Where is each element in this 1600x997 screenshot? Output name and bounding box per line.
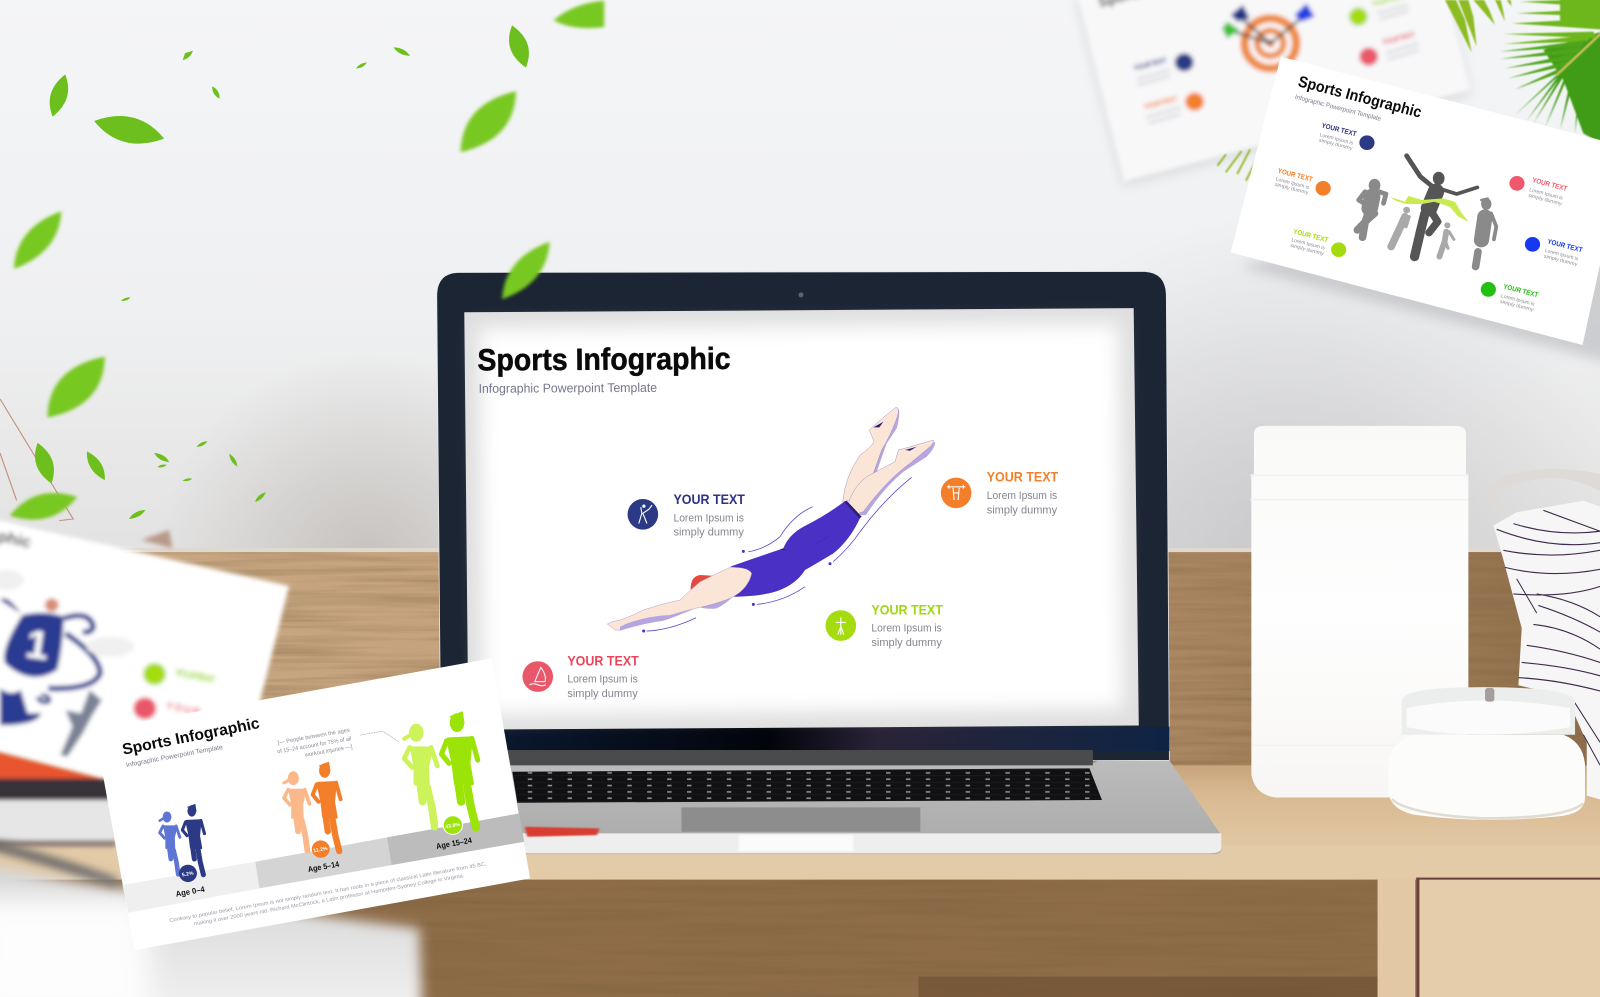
callout: red: YOUR TEXT <box>567 653 639 668</box>
callout: orange: simply dummy <box>987 504 1058 516</box>
items: simply dummy <box>1499 299 1535 313</box>
blurred slide: target: YOUR TEXT <box>1143 94 1179 111</box>
callout: green <box>826 602 943 649</box>
callout: orange <box>941 470 1059 516</box>
blurred slide: trophy: YOUR TEXT <box>174 667 217 686</box>
items <box>1274 122 1584 313</box>
blurred leaves <box>10 1 604 520</box>
callout: orange: YOUR TEXT <box>987 470 1059 485</box>
note: of 15–24 account for 75% of all <box>277 736 352 755</box>
items: Lorem Ipsum is <box>1275 177 1310 191</box>
percent badge: blue <box>179 865 197 882</box>
runners: green <box>404 712 478 827</box>
callout: red <box>522 653 639 700</box>
footnote: making it over 2000 years old. Richard McClintock, a Latin professor at Hampden-Sydney College in Virginia. <box>193 873 465 927</box>
trophy: 1 <box>23 621 52 669</box>
footnote: Contrary to popular belief, Lorem Ipsum is not simply random text. It has roots in a piece of classical Latin literature from 45 BC, <box>169 861 487 924</box>
age label: 15-24: Age 15–24 <box>435 836 473 851</box>
webcam <box>799 292 803 297</box>
sharp leaves <box>35 25 529 519</box>
age label: 0-4: Age 0–4 <box>175 885 206 899</box>
blurred items <box>143 663 166 685</box>
percent badge: orange: 11.2% <box>313 846 329 854</box>
items: simply dummy <box>1528 193 1563 207</box>
items: YOUR TEXT <box>1531 176 1569 193</box>
note <box>277 728 398 759</box>
right palm frond <box>1500 0 1600 147</box>
small palm tips <box>1218 150 1257 180</box>
laptop <box>437 271 1221 854</box>
items: simply dummy <box>1290 243 1325 257</box>
screen title: Sports Infographic <box>477 342 731 377</box>
slide: age groups <box>95 658 530 950</box>
blurred slide: trophy <box>0 518 422 997</box>
items: simply dummy <box>1274 182 1309 196</box>
items: YOUR TEXT <box>1502 283 1540 299</box>
age bands <box>122 813 524 913</box>
callout: navy: simply dummy <box>673 527 744 539</box>
wooden wall strip and desk <box>0 548 1600 997</box>
callout: orange: Lorem Ipsum is <box>987 490 1057 502</box>
callout: navy <box>628 492 745 539</box>
items: Lorem Ipsum is <box>1291 237 1326 252</box>
trophy <box>0 598 100 725</box>
callout: red: Lorem Ipsum is <box>567 674 638 686</box>
runners: orange <box>284 762 341 851</box>
callout: green: YOUR TEXT <box>871 602 943 617</box>
hinge <box>443 750 1093 765</box>
items: YOUR TEXT <box>1292 228 1330 244</box>
book and device behind <box>0 530 172 847</box>
swimmer illustration <box>607 407 935 633</box>
laptop lid bezel <box>437 271 1169 763</box>
upper palm frond <box>1445 0 1512 53</box>
runners silhouettes <box>1357 156 1496 267</box>
items: simply dummy <box>1543 254 1578 268</box>
slide subtitle: Infographic Powerpoint Template <box>1294 94 1382 123</box>
callout: red: simply dummy <box>567 688 638 700</box>
laptop bottom bezel <box>443 727 1169 753</box>
screen subtitle: Infographic Powerpoint Template <box>478 380 657 396</box>
striped cloth <box>1487 469 1600 799</box>
callout: green: Lorem Ipsum is <box>871 623 942 635</box>
callout: green: simply dummy <box>871 637 942 649</box>
palm leaves <box>1218 0 1600 180</box>
laptop screen <box>464 308 1139 730</box>
note: [— People between the ages <box>277 728 350 746</box>
slide title: Sports Infographic <box>121 715 261 759</box>
callout: navy: Lorem Ipsum is <box>673 512 744 524</box>
copper wire decoration <box>0 399 73 521</box>
callout: navy: YOUR TEXT <box>673 492 745 507</box>
candle jar <box>1388 687 1585 820</box>
cartoon figures <box>60 690 102 757</box>
blurred slide: trophy: YOUR <box>165 701 202 718</box>
items: Lorem Ipsum is <box>1319 132 1354 147</box>
target icon <box>1222 3 1315 68</box>
slide subtitle: Infographic Powerpoint Template <box>126 744 224 769</box>
laptop base <box>505 760 1221 854</box>
percent badge: blue: 5.2% <box>181 870 195 878</box>
runners: blue <box>160 804 204 875</box>
items: Lorem Ipsum is <box>1544 248 1579 262</box>
blurred slide: target: YOUR TEXT <box>1132 55 1168 73</box>
items: YOUR TEXT <box>1321 122 1358 138</box>
age label: 5-14: Age 5–14 <box>307 860 340 874</box>
blurred slide: target: YOUR TEXT <box>1381 30 1417 47</box>
items: YOUR TEXT <box>1546 238 1584 254</box>
items: YOUR TEXT <box>1277 167 1314 184</box>
blurred slide: target <box>1076 0 1470 186</box>
percent badge: green: 43.8% <box>445 822 461 830</box>
blurred foreground card <box>0 863 422 997</box>
white jar <box>1250 426 1468 797</box>
slide title: Sports Infographic <box>1296 74 1423 122</box>
items: simply dummy <box>1318 138 1354 152</box>
finish ribbon <box>1389 196 1469 222</box>
flying leaves <box>10 1 604 520</box>
items: Lorem Ipsum is <box>1529 187 1564 202</box>
slide: sports silhouettes <box>1231 57 1600 367</box>
items: Lorem Ipsum is <box>1500 293 1536 308</box>
note: workout injuries —] <box>304 744 353 759</box>
percent badge: green <box>443 816 463 834</box>
percent badge: orange <box>312 840 330 858</box>
